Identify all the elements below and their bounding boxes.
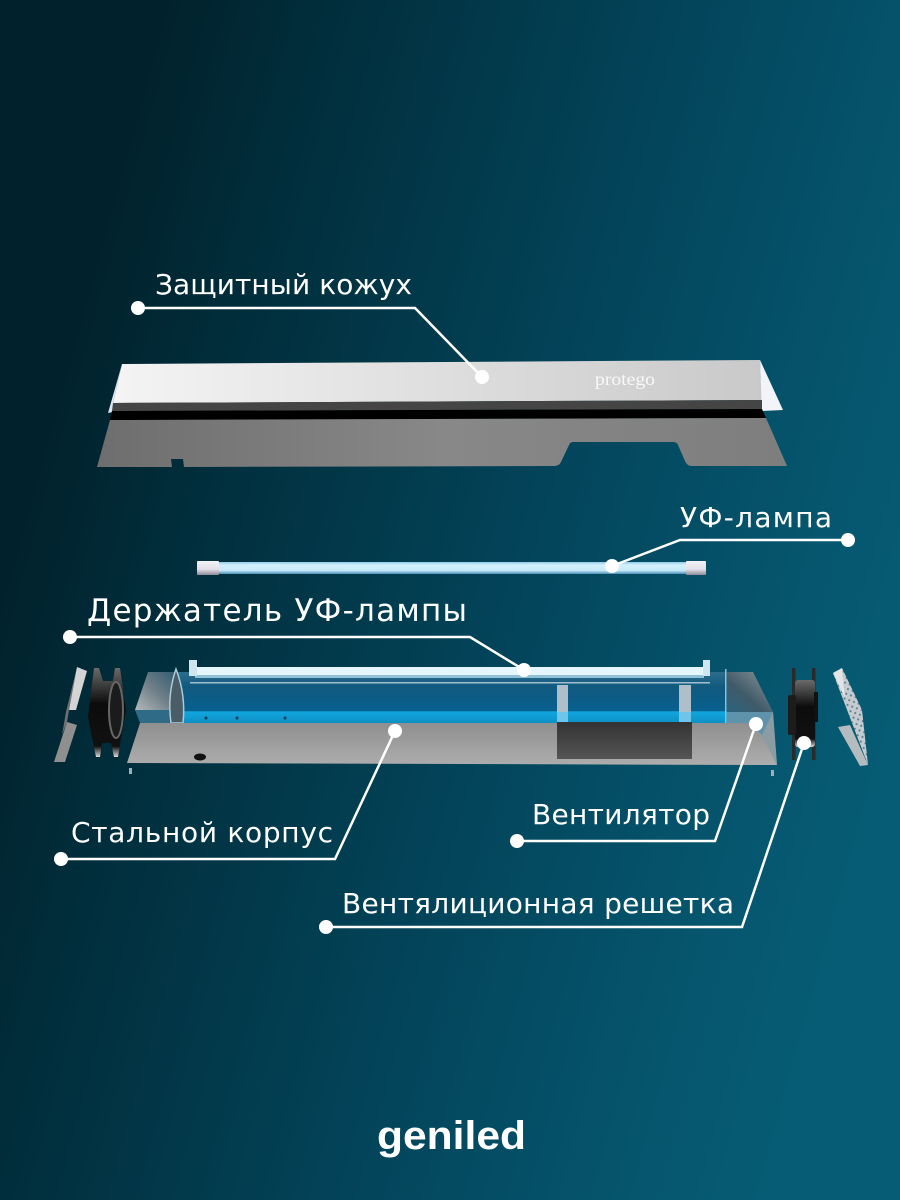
lamp holder xyxy=(189,660,710,684)
left fan xyxy=(88,668,126,757)
housing cable hole xyxy=(194,754,206,760)
label: ventilation grille: Вентялиционная решетка xyxy=(342,887,734,920)
brackets xyxy=(557,685,568,712)
left grille xyxy=(54,667,87,762)
UV lamp xyxy=(197,561,706,575)
right grille xyxy=(833,668,868,766)
cover brand text: protego xyxy=(595,369,655,389)
label: fan: Вентилятор xyxy=(532,798,710,831)
right fan xyxy=(788,668,818,760)
right housing end xyxy=(727,672,773,712)
housing window xyxy=(557,722,692,759)
label: protective cover: Защитный кожух xyxy=(155,268,412,301)
label: lamp holder: Держатель УФ-лампы xyxy=(87,593,467,629)
left housing end xyxy=(135,672,178,712)
label: steel housing: Стальной корпус xyxy=(71,816,333,849)
protective cover xyxy=(97,360,787,467)
callout dots xyxy=(54,301,855,934)
logo: geniled xyxy=(377,1114,526,1158)
steel housing xyxy=(127,669,777,776)
housing front panel xyxy=(127,723,777,765)
label: UV lamp: УФ-лампа xyxy=(680,501,832,534)
callout lines xyxy=(61,308,848,927)
